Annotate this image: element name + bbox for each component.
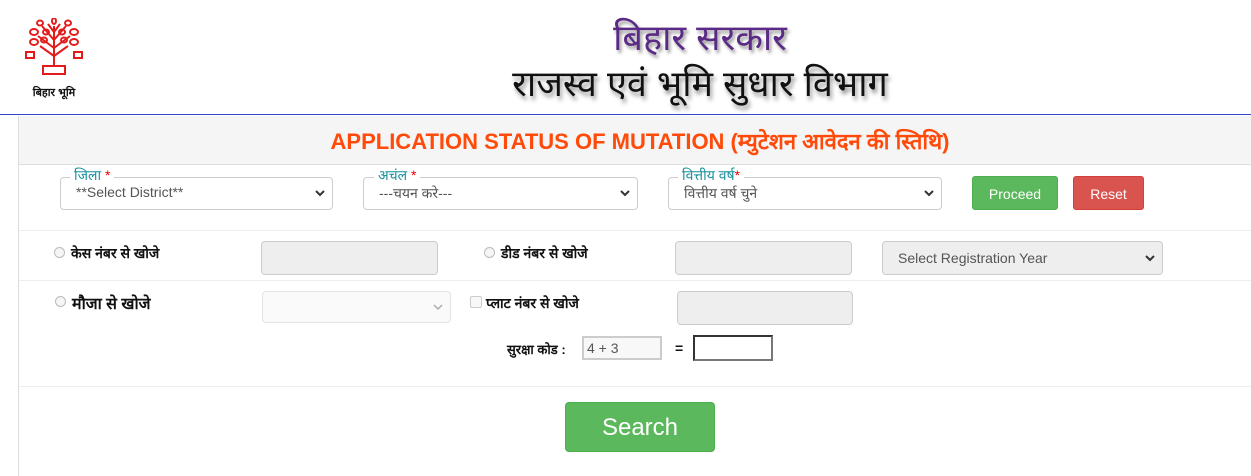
button: reset: Reset [1090,186,1127,202]
select: registration year [882,241,1163,275]
select: financial year [668,177,942,210]
captcha [506,335,773,361]
label: financial year: वित्तीय वर्ष* [682,167,740,183]
heading: APPLICATION STATUS OF MUTATION (म्युटेशन आवेदन की स्तिथि) [331,129,949,154]
heading band [19,116,1251,165]
captcha: 4 + 3 [587,340,619,356]
option: mauja: मौजा से खोजे [72,296,151,313]
button: search [565,402,715,452]
select: district [60,177,333,210]
select: financial year: वित्तीय वर्ष चुने [684,185,757,201]
input: case number [261,241,438,275]
input: deed number [675,241,852,275]
select: registration year: Select Registration Year [898,250,1047,266]
button: proceed [972,176,1058,210]
button: reset [1073,176,1144,210]
title: Bihar Sarkar: बिहार सरकार [613,17,787,58]
input: plot number [677,291,853,325]
title: department: राजस्व एवं भूमि सुधार विभाग [512,63,888,104]
select: district: **Select District** [76,184,183,200]
logo [25,18,83,100]
captcha: = [675,340,683,356]
option: case number: केस नंबर से खोजे [71,245,159,261]
option: plot number: प्लाट नंबर से खोजे [486,295,579,311]
select: anchal: ---चयन करे--- [379,185,452,201]
captcha: सुरक्षा कोड : [507,342,566,357]
panel: form [18,116,1251,476]
option: deed number: डीड नंबर से खोजे [501,245,588,261]
select: anchal [363,177,638,210]
button: search: Search [602,414,678,441]
text: बिहार भूमि [33,87,75,99]
label: anchal: अचंल * [378,167,416,183]
divider blue [0,114,1251,115]
select: mauja [262,291,451,323]
label: district: जिला * [74,167,110,183]
button: proceed: Proceed [989,186,1041,202]
